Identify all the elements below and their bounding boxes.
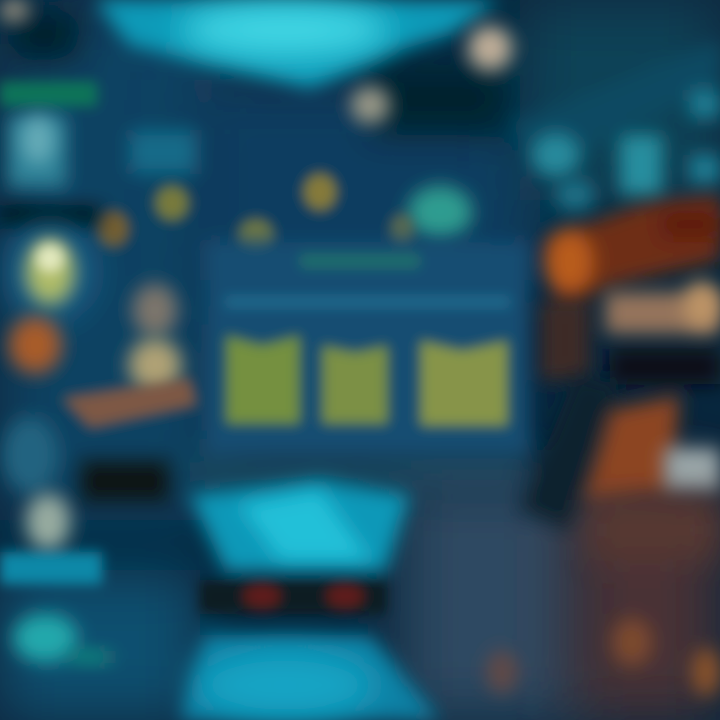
board right column bbox=[420, 340, 508, 426]
right ceiling panels bbox=[510, 40, 720, 211]
glowing central table bbox=[190, 480, 410, 614]
board subheading bbox=[225, 296, 510, 308]
ceiling skylight bbox=[95, 0, 500, 88]
ceiling lights bbox=[0, 0, 512, 123]
right side orange structure bbox=[540, 195, 720, 384]
table dark base with red lights bbox=[198, 580, 388, 614]
dark standing figure bbox=[520, 375, 620, 530]
board left column bbox=[226, 335, 300, 424]
hanging lanterns bbox=[97, 130, 472, 253]
central information board bbox=[205, 240, 530, 455]
seated figure and counter bbox=[62, 284, 198, 502]
board heading bbox=[300, 254, 420, 268]
right lower orange figure bbox=[486, 395, 720, 696]
left wall shelves bbox=[0, 82, 110, 664]
board middle column bbox=[322, 345, 388, 424]
glowing floor bbox=[180, 635, 440, 720]
